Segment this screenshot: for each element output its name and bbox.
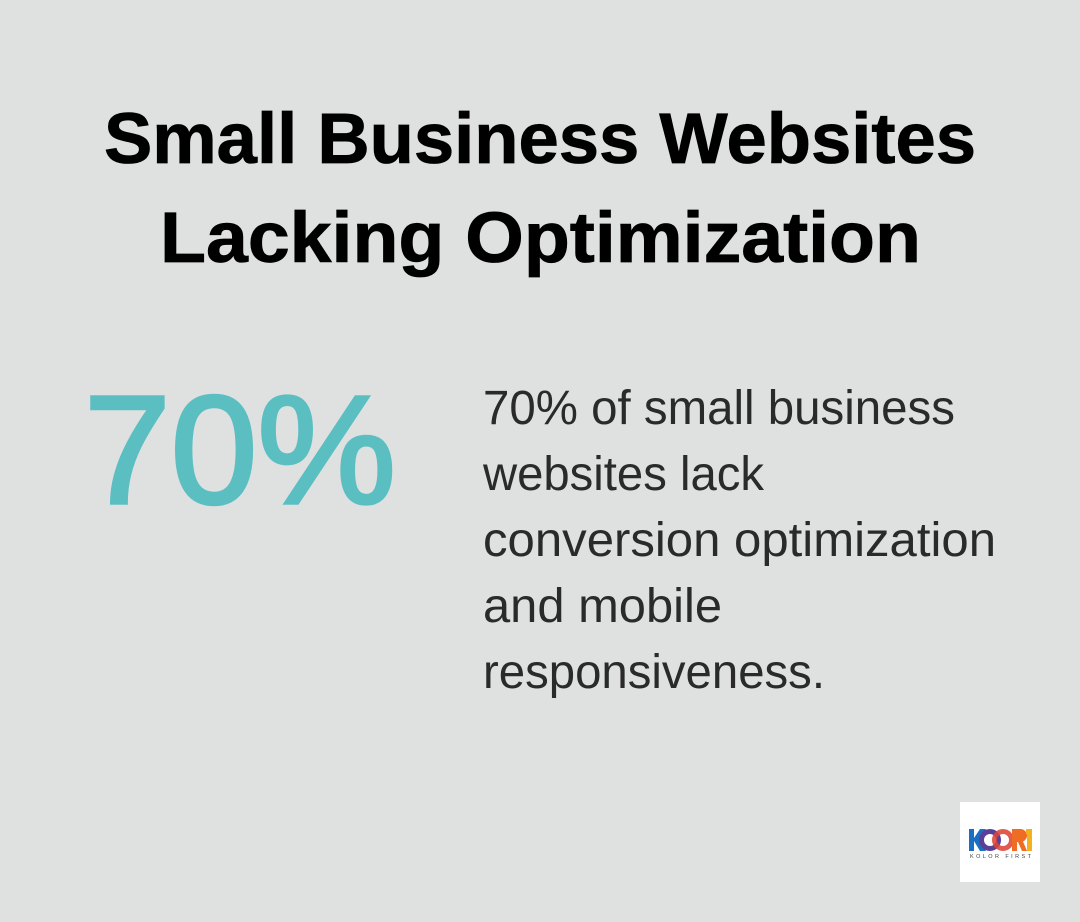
description text: 70% of small business (483, 382, 955, 435)
logo tagline: KOLOR FIRST (970, 854, 1032, 860)
logo digit 1 (1026, 829, 1032, 851)
title (104, 100, 976, 278)
logo letter O (second) (994, 832, 1012, 848)
logo letter R (1012, 829, 1027, 851)
title: Lacking Optimization (160, 199, 921, 278)
logo: Koor1 Kolor First (960, 802, 1040, 882)
description text: and mobile (483, 580, 722, 633)
logo letter K (969, 829, 986, 851)
description text: conversion optimization (483, 514, 996, 567)
description text: websites lack (482, 448, 765, 501)
description text: responsiveness. (483, 646, 825, 699)
big statistic: 70%: 70% (84, 364, 396, 536)
title: Small Business Websites (104, 100, 976, 179)
description text (482, 382, 996, 699)
logo letter O (first) (982, 832, 998, 848)
